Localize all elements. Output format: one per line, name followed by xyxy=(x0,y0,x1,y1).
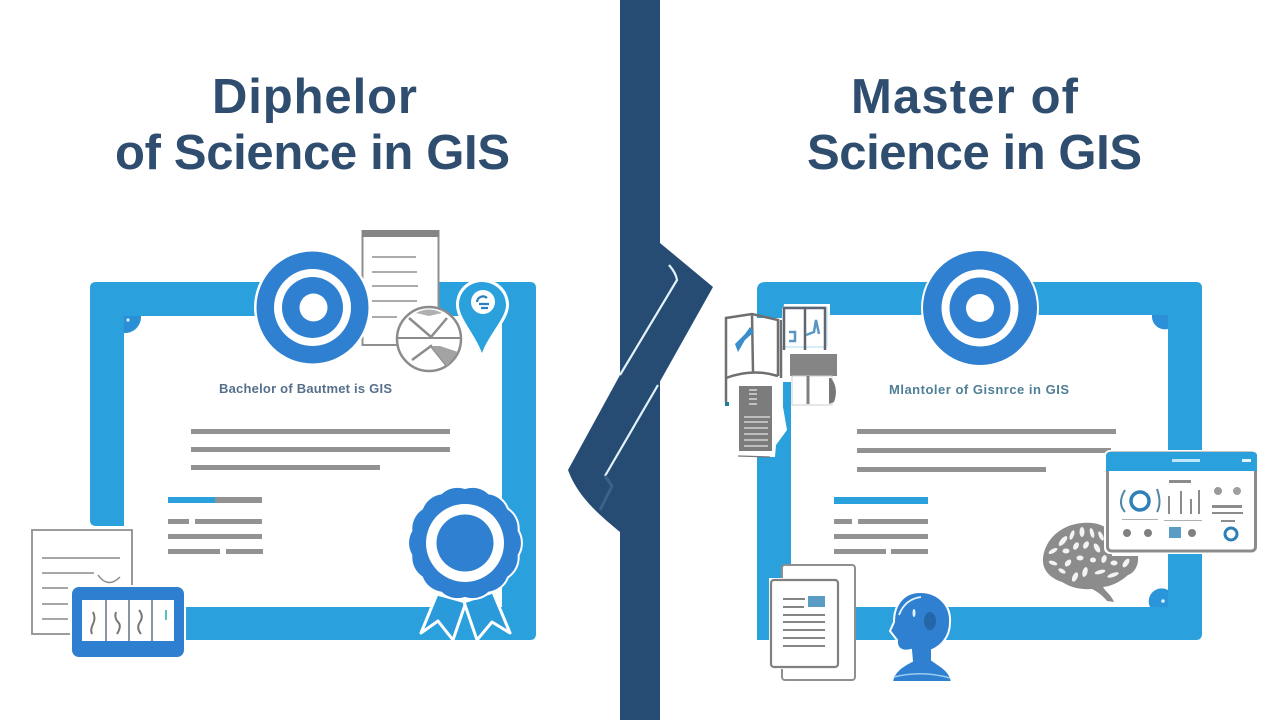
standing map panel xyxy=(783,307,827,350)
icon: seal circle xyxy=(921,249,1039,367)
icon: analytics dashboard tablet xyxy=(1104,450,1259,554)
certificate subtitle: master: Mlantoler of Gisnrce in GIS xyxy=(889,382,1069,397)
center divider with zigzag arrow xyxy=(568,0,713,720)
icon: award rosette xyxy=(408,487,522,640)
title: master: Master of xyxy=(851,70,1079,124)
title: master xyxy=(807,70,1142,180)
title: bachelor xyxy=(115,70,510,180)
icon: document top xyxy=(362,230,439,345)
icon: globe xyxy=(397,307,461,371)
certificate frame: master xyxy=(757,282,1202,640)
title: bachelor: of Science in GIS xyxy=(115,126,510,180)
certificate text lines: bachelor xyxy=(168,429,450,554)
certificate text lines: master xyxy=(834,429,1116,554)
map marks xyxy=(735,327,754,352)
title: master: Science in GIS xyxy=(807,126,1142,180)
folded map xyxy=(726,314,781,402)
icon: map pin xyxy=(456,279,509,356)
certificate frame: bachelor xyxy=(90,282,536,640)
icon: map tablet xyxy=(70,585,186,658)
grey data block xyxy=(790,354,837,405)
icon: brain xyxy=(1043,523,1138,602)
panel: bachelor certificate xyxy=(32,70,536,658)
icon: GIS map cluster xyxy=(722,304,838,457)
icon: head profile xyxy=(890,592,952,682)
panel: master certificate xyxy=(722,70,1259,682)
icon: seal circle xyxy=(254,249,371,366)
icon: document bottom xyxy=(32,530,132,634)
icon: stacked documents xyxy=(769,565,855,680)
certificate subtitle: bachelor: Bachelor of Bautmet is GIS xyxy=(219,381,392,396)
title: bachelor: Diphelor xyxy=(212,70,417,124)
server tower xyxy=(738,386,772,457)
